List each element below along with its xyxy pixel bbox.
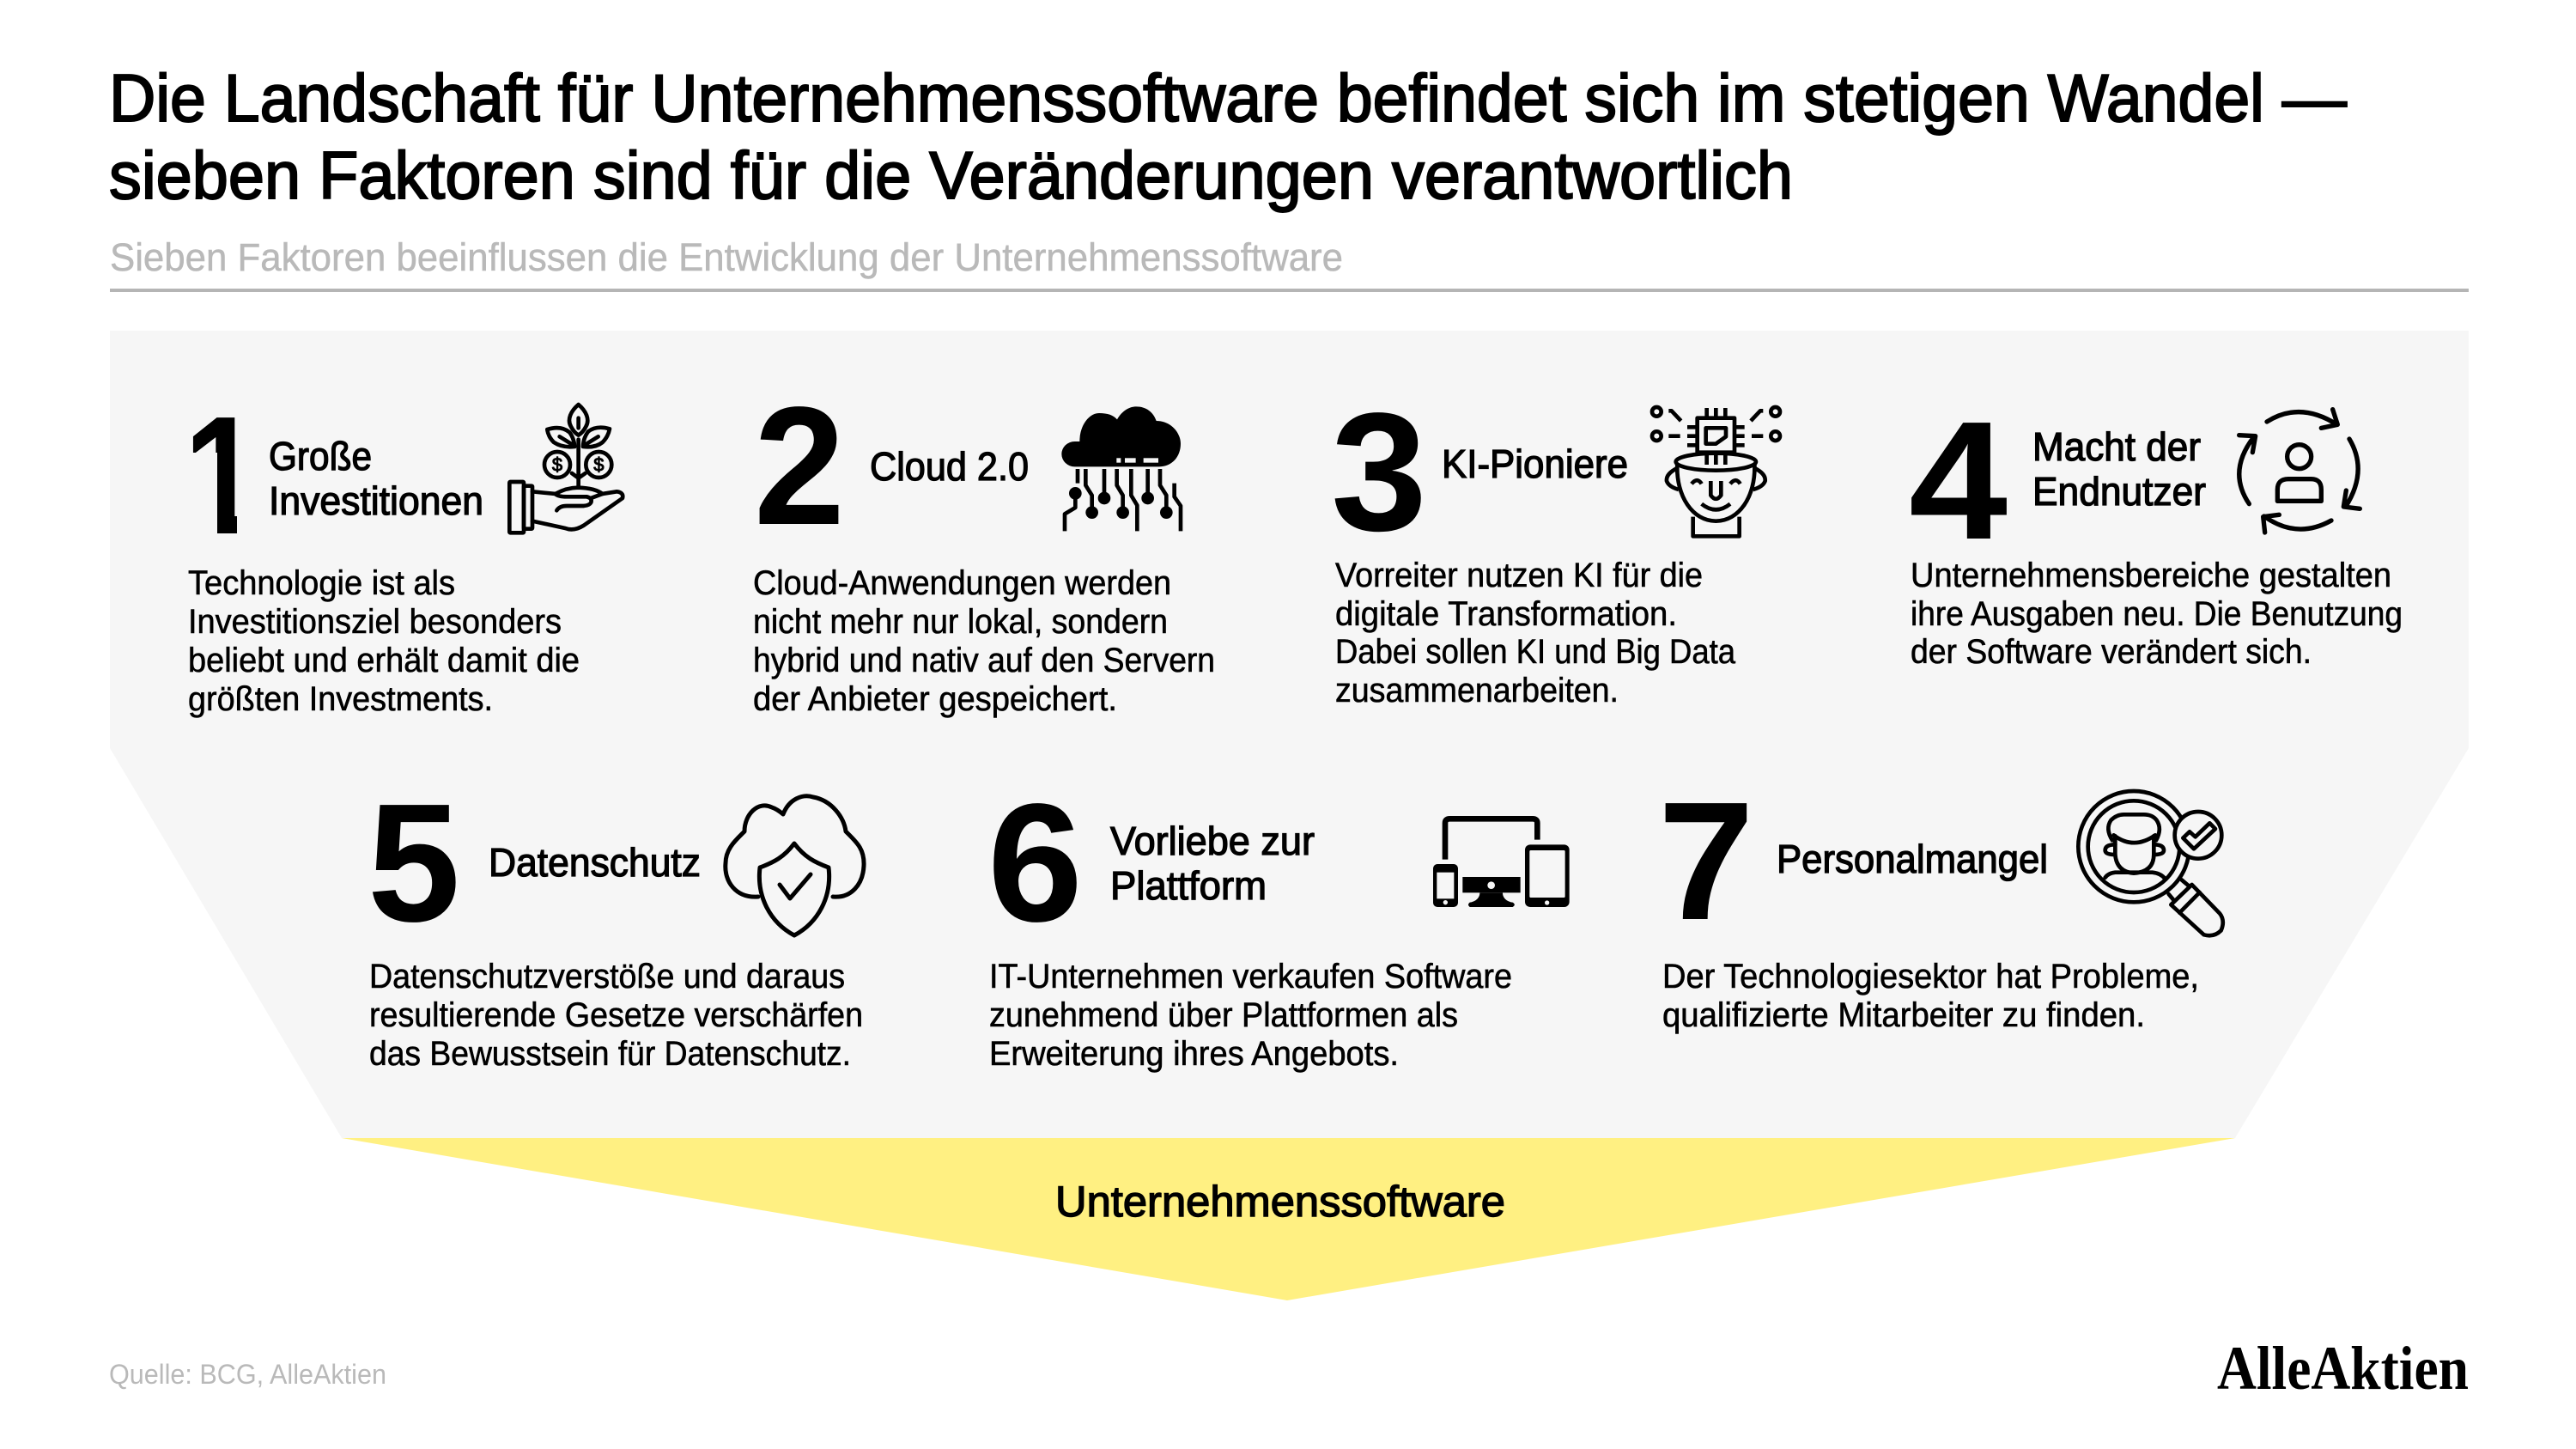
title [109,60,2347,213]
heading 6 [1110,819,1315,908]
body 2: hybrid und nativ auf den Servern [753,642,1215,679]
icon: magnifier with person [2078,791,2223,935]
body 5: Datenschutzverstöße und daraus [369,958,845,995]
number 1: 1 [184,381,260,569]
heading 7: Personalmangel [1777,837,2048,881]
number 3: 3 [1331,378,1427,566]
body 2: Cloud-Anwendungen werden [753,564,1171,602]
heading 6: Vorliebe zur [1110,819,1315,863]
heading 5: Datenschutz [489,840,701,885]
heading 2: Cloud 2.0 [870,444,1029,489]
icon: hand with plant and coins [509,405,623,533]
icon: cloud with circuit [1061,406,1181,531]
heading 1: Große [269,434,372,478]
body 1: Technologie ist als [188,564,455,602]
icon: hand with plant and coins: $ [593,454,604,476]
icon: hand with plant and coins: $ [552,454,562,476]
body 4 [1911,557,2403,671]
body 4: der Software verändert sich. [1911,633,2312,671]
body 4: Unternehmensbereiche gestalten [1911,557,2391,594]
body 2: der Anbieter gespeichert. [753,680,1117,718]
heading 4: Endnutzer [2032,469,2206,514]
title: sieben Faktoren sind für die Veränderungen verantwortlich [109,137,1793,213]
body 3: zusammenarbeiten. [1335,672,1619,709]
body 1: beliebt und erhält damit die [188,642,580,679]
logo: AlleAktien: AlleAktien [2217,1334,2469,1403]
subtitle: Sieben Faktoren beeinflussen die Entwicklung der Unternehmenssoftware [110,235,1343,279]
heading 3: KI-Pioniere [1442,441,1628,486]
factor 1 [184,381,623,718]
body 6: zunehmend über Plattformen als [989,996,1458,1034]
icon: user in cycle arrows [2239,410,2360,533]
body 5 [369,958,863,1073]
body 2 [753,564,1215,718]
body 7: Der Technologiesektor hat Probleme, [1662,958,2199,995]
body 1 [188,564,580,718]
icon: cloud with shield [726,796,864,935]
body 6: Erweiterung ihres Angebots. [989,1035,1399,1073]
heading 4 [2032,424,2206,514]
body 7: qualifizierte Mitarbeiter zu finden. [1662,996,2145,1034]
body 3 [1335,557,1736,709]
body 5: resultierende Gesetze verschärfen [369,996,863,1034]
body 6 [989,958,1512,1073]
funnel tip: yellow arrow [342,1138,2235,1300]
heading 4: Macht der [2032,424,2201,469]
factor 4 [1909,387,2403,671]
body 3: Vorreiter nutzen KI für die [1335,557,1703,594]
number 6: 6 [987,769,1083,957]
body 5: das Bewusstsein für Datenschutz. [369,1035,851,1073]
number 7: 7 [1658,767,1754,955]
title: Die Landschaft für Unternehmenssoftware befindet sich im stetigen Wandel — [109,60,2347,136]
heading 6: Plattform [1110,863,1267,908]
body 3: Dabei sollen KI und Big Data [1335,633,1736,671]
body 7 [1662,958,2199,1034]
factor 2 [753,372,1215,718]
panel: funnel background [110,331,2469,1138]
heading 1 [269,434,483,523]
icon: head with chip [1652,407,1780,536]
icon: devices [1433,819,1570,907]
source note: Quelle: BCG, AlleAktien [109,1359,386,1390]
body 4: ihre Ausgaben neu. Die Benutzung [1911,595,2403,633]
number 2: 2 [754,372,845,560]
body 6: IT-Unternehmen verkaufen Software [989,958,1512,995]
body 2: nicht mehr nur lokal, sondern [753,603,1168,641]
body 3: digitale Transformation. [1335,595,1677,633]
factor 7 [1658,767,2223,1034]
factor 5 [368,769,864,1073]
factor 3 [1331,378,1780,709]
body 1: Investitionsziel besonders [188,603,562,641]
number 4: 4 [1909,387,2008,575]
heading 1: Investitionen [269,478,483,523]
factor 6 [987,769,1570,1073]
number 5: 5 [368,769,460,957]
body 1: größten Investments. [188,680,493,718]
yellow arrow label: Unternehmenssoftware [1055,1178,1505,1226]
